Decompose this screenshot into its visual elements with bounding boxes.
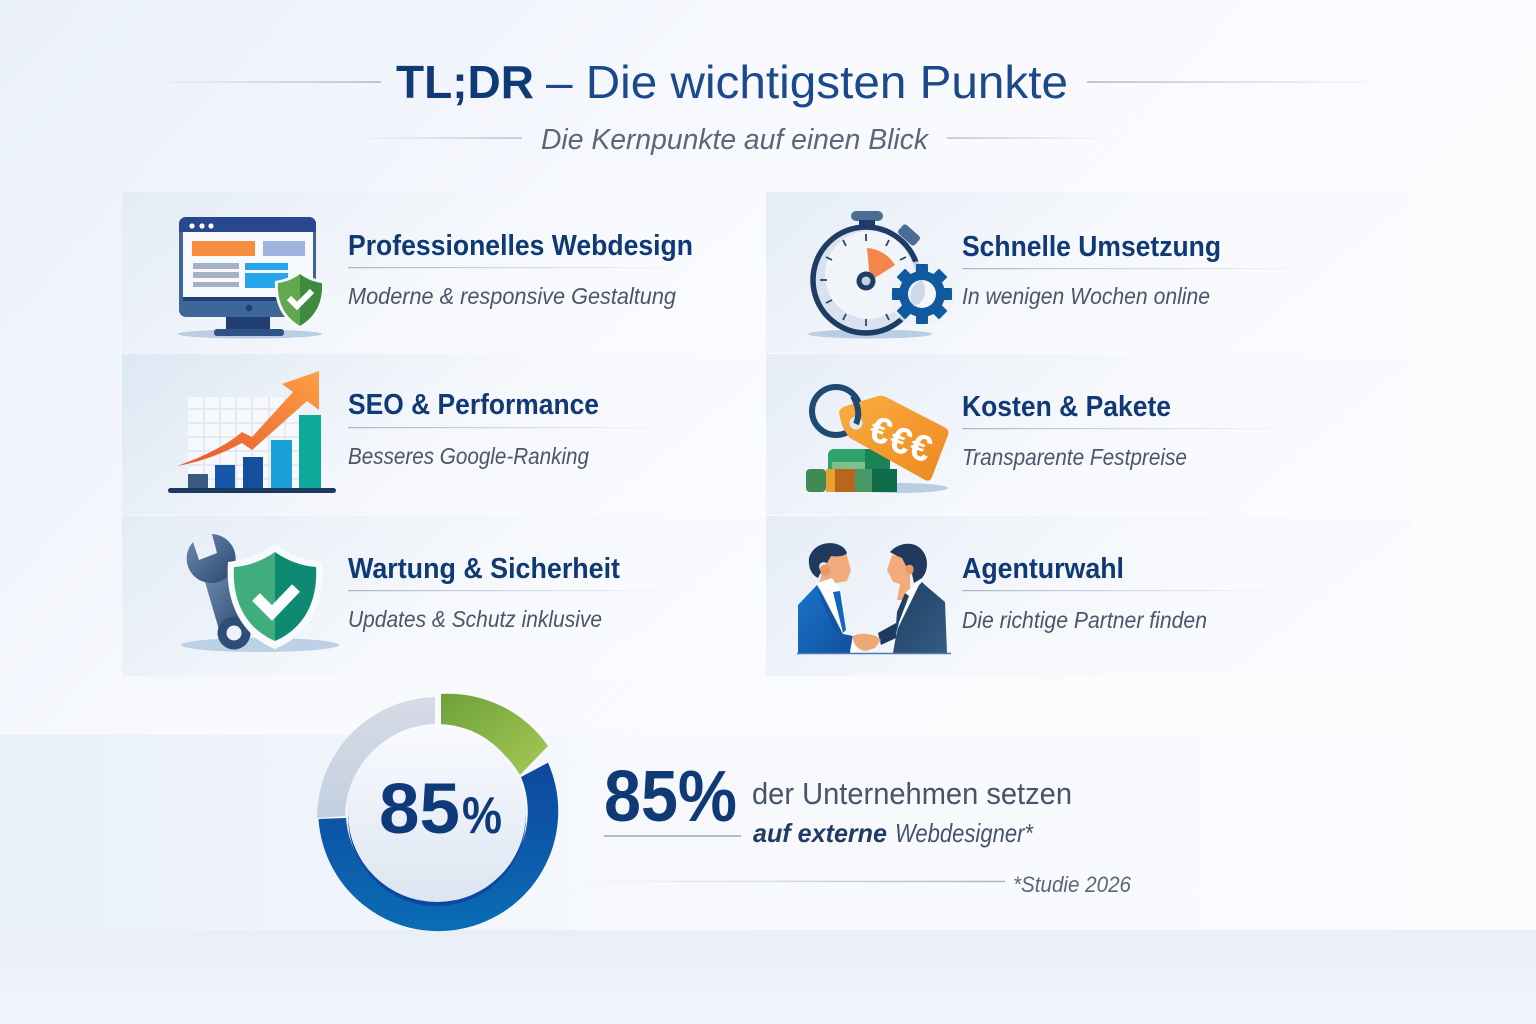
statistic line two (753, 818, 1034, 848)
icon: two people shaking hands (797, 543, 951, 654)
icon: monitor with shield (178, 217, 325, 338)
icon: price tag with money stack: € (864, 408, 898, 453)
icon: stopwatch with gear (808, 211, 955, 338)
panel: Kosten & Pakete (766, 354, 1412, 515)
description: Moderne & responsive Gestaltung (348, 283, 676, 309)
panel: Professionelles Webdesign (122, 192, 765, 353)
heading: Schnelle Umsetzung (962, 231, 1221, 263)
donut segment: green (441, 694, 548, 775)
heading: SEO & Performance (348, 389, 599, 421)
panel: Agenturwahl (766, 516, 1412, 676)
title (140, 56, 1395, 108)
panel: SEO & Performance (122, 354, 765, 515)
donut segment: blue (318, 763, 558, 931)
heading: Wartung & Sicherheit (348, 553, 620, 585)
subtitle: Die Kernpunkte auf einen Blick (541, 124, 929, 156)
icon: growth chart with arrow (168, 371, 336, 493)
description: In wenigen Wochen online (962, 283, 1210, 309)
description: Updates & Schutz inklusive (348, 606, 602, 632)
heading: Kosten & Pakete (962, 391, 1171, 423)
heading: Professionelles Webdesign (348, 230, 693, 262)
donut centre: 85 (379, 770, 460, 849)
statistic text (575, 757, 1132, 897)
donut segment: gray (317, 697, 435, 818)
statistic line two: Webdesigner* (895, 818, 1034, 848)
heading: Agenturwahl (962, 553, 1124, 585)
statistic line two: auf externe (753, 818, 887, 848)
panel: Schnelle Umsetzung (766, 192, 1412, 353)
description: Transparente Festpreise (962, 444, 1187, 470)
statistic line one: der Unternehmen setzen (752, 776, 1072, 811)
bottom strip (0, 930, 1536, 1024)
title: – Die wichtigsten Punkte (546, 56, 1068, 108)
big number: 85% (604, 757, 737, 837)
description: Die richtige Partner finden (962, 607, 1207, 633)
icon: price tag with money stack: € (904, 425, 938, 470)
icon: wrench and shield (181, 534, 339, 652)
donut chart: 85% (317, 694, 558, 931)
donut centre (348, 724, 526, 906)
title: TL;DR (396, 56, 534, 108)
donut centre: % (462, 787, 502, 845)
panel: Wartung & Sicherheit (122, 516, 765, 676)
icon: price tag with money stack: € (884, 418, 918, 463)
description: Besseres Google-Ranking (348, 443, 589, 469)
icon: price tag with money stack (806, 387, 948, 493)
footnote: *Studie 2026 (1013, 872, 1132, 897)
panel: statistic band (0, 735, 1536, 930)
